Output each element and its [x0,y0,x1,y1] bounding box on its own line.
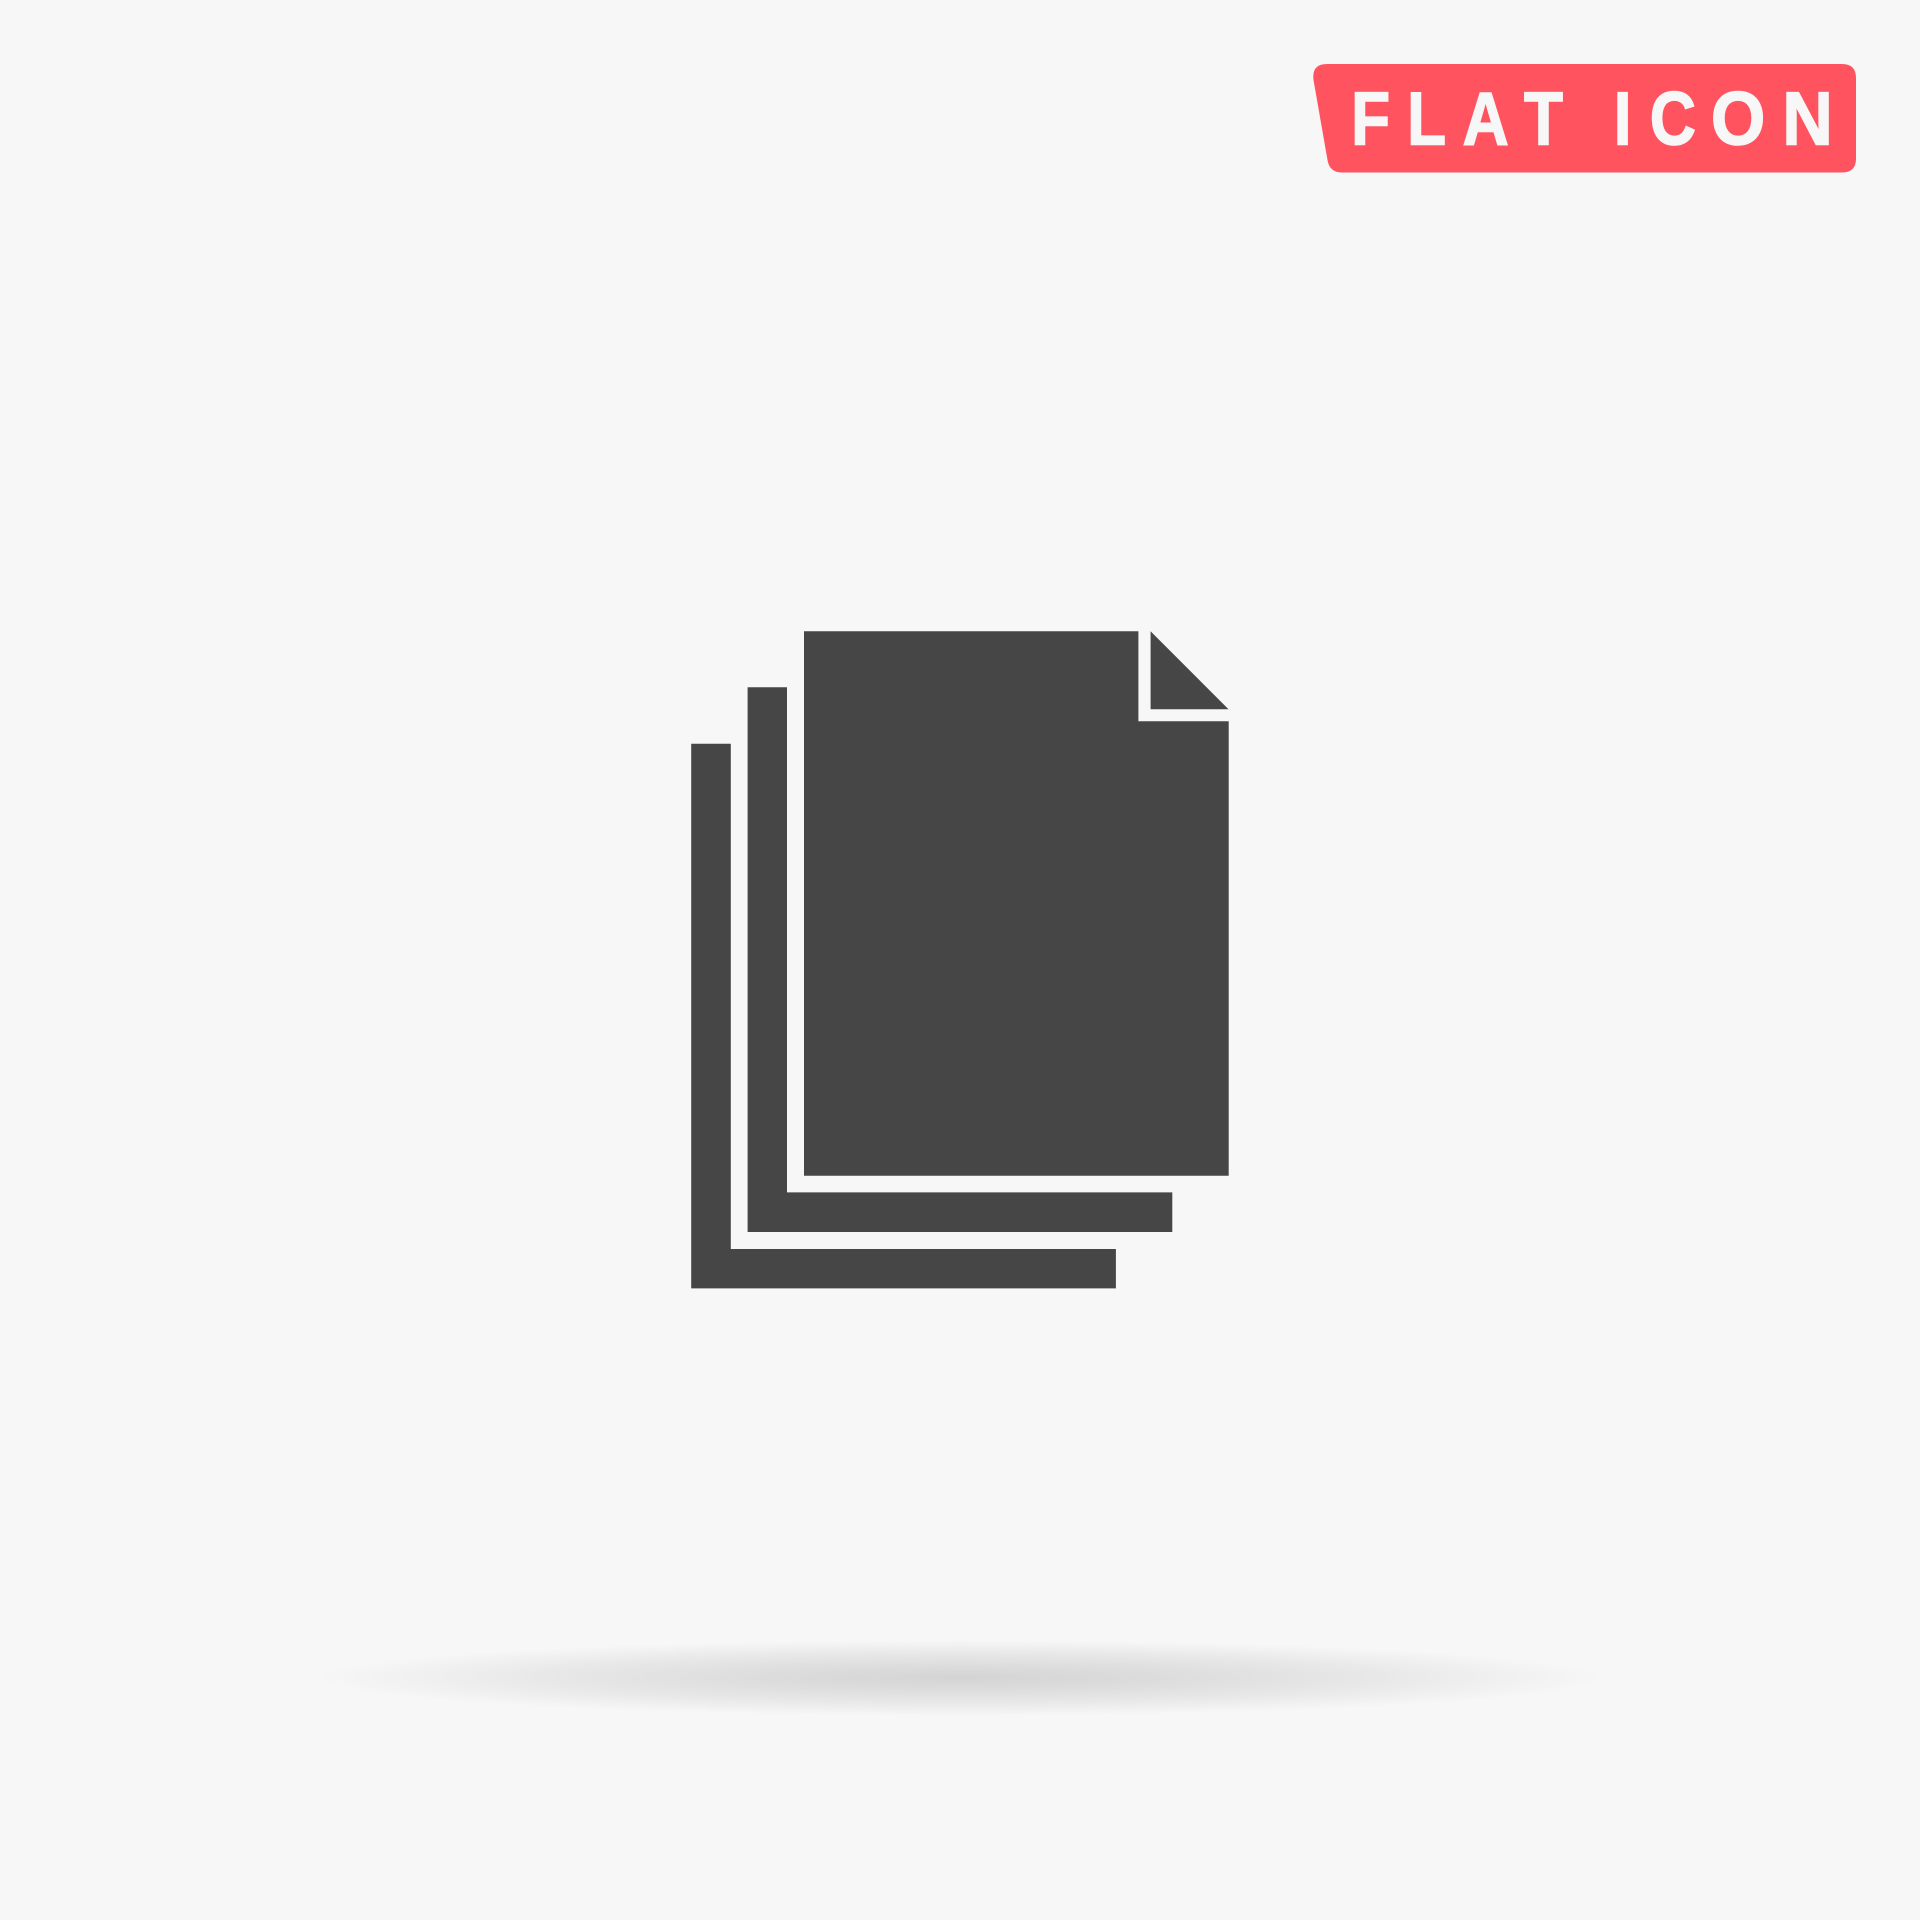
folded corner [1151,631,1228,709]
badge: flat icon [1313,64,1856,172]
front sheet [804,631,1229,1176]
back sheet [691,744,1116,1288]
label: on: ON [1711,77,1833,161]
middle sheet [748,687,1172,1232]
badge label [1351,76,1833,161]
label: flat i c: FLAT IC [1351,76,1696,160]
ground shadow [318,1640,1602,1716]
icon: stacked documents [691,631,1229,1288]
badge shape [1313,64,1856,172]
